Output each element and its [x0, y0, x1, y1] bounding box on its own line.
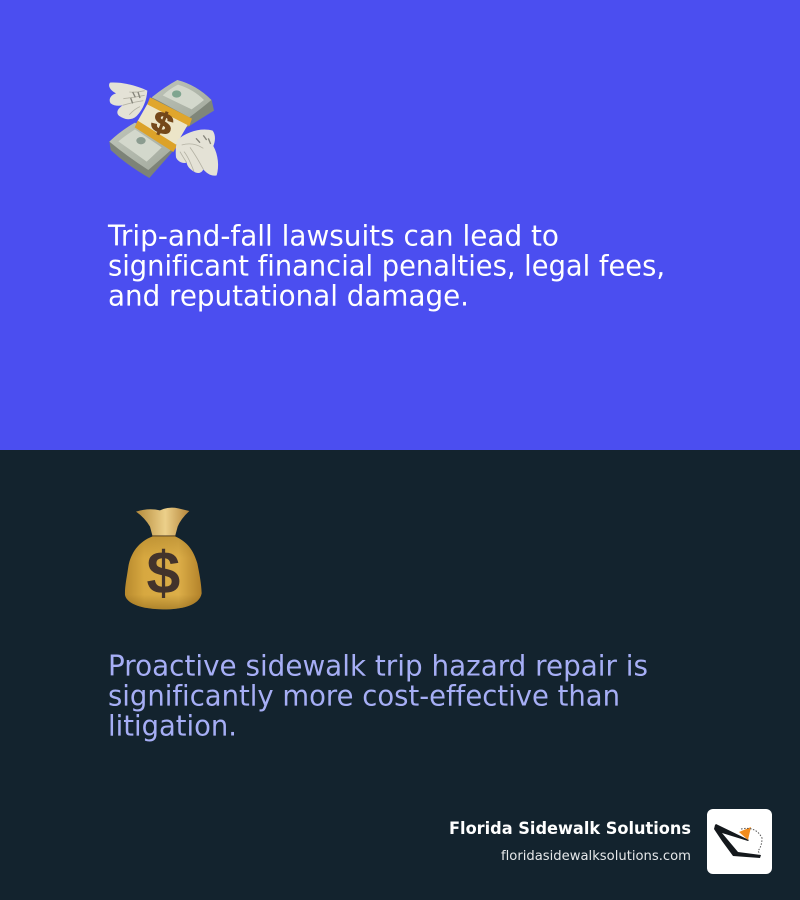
text: lawsuit consequences: significant financial penalties, legal fees,: [108, 250, 665, 282]
text: repair cost-effectiveness: [108, 650, 648, 742]
icon: money with wings: $: [147, 105, 178, 143]
text: repair cost-effectiveness: Proactive sidewalk trip hazard repair is: [108, 650, 648, 682]
website url: floridasidewalksolutions.com: [501, 849, 691, 864]
logo: [707, 809, 772, 874]
text: repair cost-effectiveness: litigation.: [108, 710, 237, 742]
icon: money bag: $: [146, 539, 180, 607]
text: lawsuit consequences: and reputational damage.: [108, 280, 469, 312]
sub-icon: right wing: [176, 130, 218, 176]
text: repair cost-effectiveness: significantly more cost-effective than: [108, 680, 620, 712]
text: lawsuit consequences: [107, 220, 665, 312]
icon: money with wings: [109, 80, 218, 178]
brand name: Florida Sidewalk Solutions: [449, 819, 691, 839]
icon: money bag: [125, 508, 202, 609]
panel: lawsuit costs: [0, 0, 800, 450]
panel: proactive repair: [0, 450, 800, 900]
text: lawsuit consequences: Trip-and-fall lawsuits can lead to: [107, 220, 559, 252]
sub-icon: left wing: [109, 83, 147, 119]
